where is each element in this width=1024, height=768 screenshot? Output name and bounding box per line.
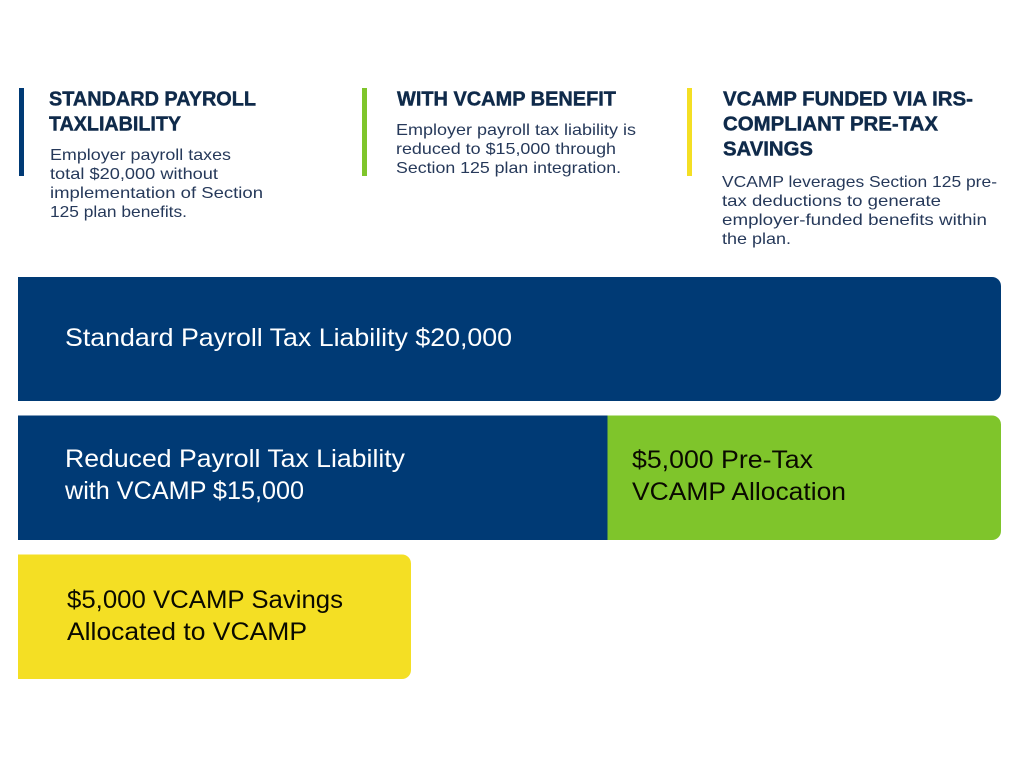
bar: $5,000 pre-tax VCAMP allocation: $5,000 Pre-Tax: [632, 446, 814, 474]
bar: reduced payroll tax liability $15,000: [18, 416, 608, 540]
bar: reduced payroll tax liability $15,000: Reduced Payroll Tax Liability: [65, 445, 406, 473]
body text: VCAMP funding description: VCAMP leverages Section 125 pre-: [722, 174, 997, 191]
bar: $5,000 pre-tax VCAMP allocation: [608, 416, 1001, 540]
body text: standard payroll description: Employer payroll taxes: [50, 147, 231, 164]
body text: standard payroll description: 125 plan benefits.: [50, 204, 187, 221]
heading: standard payroll tax liability: [49, 88, 256, 136]
heading: VCAMP funded via IRS-compliant pre-tax savings: [723, 88, 973, 160]
bar: $5,000 VCAMP savings allocated: [18, 554, 411, 679]
bar: standard payroll tax liability $20,000: [18, 277, 1001, 401]
accent bar: navy: [19, 88, 24, 176]
bar: standard payroll tax liability $20,000: Standard Payroll Tax Liability $20,000: [65, 324, 512, 352]
column: VCAMP funded via IRS-compliant pre-tax savings: [687, 88, 997, 248]
accent bar: yellow: [687, 88, 692, 176]
heading: VCAMP funded via IRS-compliant pre-tax savings: SAVINGS: [723, 138, 813, 160]
body text: standard payroll description: total $20,000 without: [50, 166, 219, 183]
bar: reduced payroll tax liability $15,000: with VCAMP $15,000: [64, 477, 304, 505]
body text: standard payroll description: implementation of Section: [50, 185, 263, 202]
column: standard payroll tax liability: [19, 88, 263, 221]
body text: VCAMP benefit description: reduced to $15,000 through: [396, 141, 616, 158]
accent bar: green: [362, 88, 367, 176]
body text: VCAMP funding description: the plan.: [722, 231, 791, 248]
column: with VCAMP benefit: [362, 88, 636, 177]
bar: $5,000 pre-tax VCAMP allocation: VCAMP Allocation: [632, 478, 846, 506]
heading: standard payroll tax liability: TAXLIABILITY: [49, 114, 182, 136]
heading: with VCAMP benefit: WITH VCAMP BENEFIT: [397, 88, 616, 110]
heading: VCAMP funded via IRS-compliant pre-tax savings: COMPLIANT PRE-TAX: [723, 114, 939, 136]
body text: VCAMP funding description: employer-funded benefits within: [722, 212, 987, 229]
body text: standard payroll description: [50, 147, 263, 221]
body text: VCAMP benefit description: Section 125 plan integration.: [396, 160, 621, 177]
body text: VCAMP benefit description: Employer payroll tax liability is: [396, 122, 636, 139]
heading: VCAMP funded via IRS-compliant pre-tax savings: VCAMP FUNDED VIA IRS-: [723, 88, 973, 110]
body text: VCAMP funding description: tax deductions to generate: [722, 193, 941, 210]
body text: VCAMP benefit description: [396, 122, 636, 177]
bar: $5,000 VCAMP savings allocated: $5,000 VCAMP Savings: [67, 586, 343, 614]
body text: VCAMP funding description: [722, 174, 997, 248]
heading: standard payroll tax liability: STANDARD PAYROLL: [49, 88, 256, 110]
bar: $5,000 VCAMP savings allocated: Allocated to VCAMP: [67, 618, 307, 646]
